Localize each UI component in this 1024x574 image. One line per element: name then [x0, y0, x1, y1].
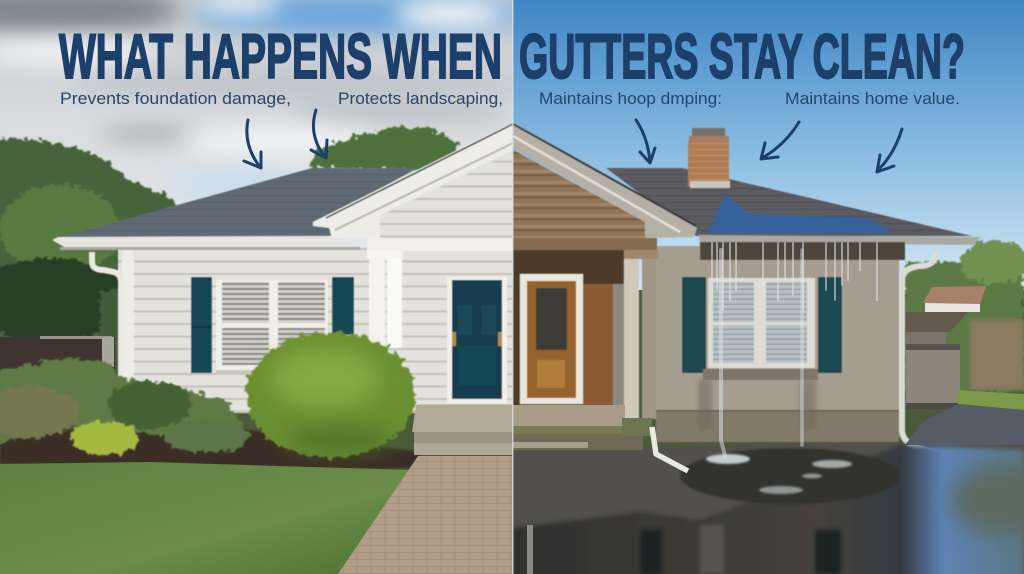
tree: left background — [0, 138, 178, 345]
water splashes — [706, 454, 852, 494]
arrows — [244, 110, 902, 172]
arrow 5 — [877, 129, 902, 172]
title: WHAT HAPPENS WHEN — [59, 22, 502, 92]
gable wall — [380, 152, 513, 240]
downspout: right — [902, 252, 938, 453]
chimney — [688, 128, 730, 188]
left shutters — [191, 277, 354, 373]
porch columns — [624, 259, 656, 419]
blue wet roof patch — [708, 195, 895, 233]
storage box and yard — [905, 344, 1024, 445]
gable fascia — [313, 122, 513, 238]
house: left clean side — [52, 122, 513, 413]
overflow water streams — [712, 243, 877, 456]
front door — [447, 277, 507, 403]
window sill — [703, 369, 818, 380]
trees and neighbouring buildings: right background — [905, 240, 1024, 392]
shrubs row — [0, 358, 245, 450]
left window — [216, 280, 328, 370]
house: right dirty side — [513, 122, 980, 453]
label: home value: Maintains home value. — [785, 89, 960, 108]
fence — [0, 336, 115, 369]
porch beam — [513, 238, 658, 259]
weathered wood gable — [513, 150, 645, 240]
gable fascia — [513, 122, 697, 238]
right shutters — [682, 277, 842, 373]
ground: right dark asphalt — [513, 440, 1024, 574]
left roof — [57, 168, 418, 238]
front steps: left — [412, 405, 513, 455]
stucco wall — [656, 246, 899, 426]
arrow 3 — [636, 120, 655, 163]
panel: right sky — [513, 0, 1024, 290]
flood water — [513, 445, 1024, 574]
large round boxwood bush — [246, 332, 416, 458]
porch columns — [367, 250, 403, 348]
shrub: yellow-green — [71, 421, 139, 455]
panel: left sky with clouds — [0, 0, 530, 300]
broken white downspout elbow — [652, 427, 688, 471]
centre split line — [512, 0, 514, 574]
arrow 2 — [311, 110, 327, 158]
clean gutter — [52, 236, 360, 375]
brick walkway — [338, 456, 513, 574]
front steps: right — [513, 405, 652, 450]
overflowing gutter — [698, 235, 980, 260]
water stains — [698, 380, 816, 430]
arrow 1 — [244, 120, 261, 168]
lawn — [0, 462, 410, 574]
label: foundation: Prevents foundation damage, — [60, 89, 291, 108]
porch wall — [402, 251, 513, 405]
arrow 4 — [761, 122, 799, 159]
right window — [708, 278, 815, 368]
porch beam — [367, 238, 513, 251]
benefit labels — [60, 89, 960, 108]
tree: behind roof — [308, 127, 460, 170]
label: landscaping: Protects landscaping, — [338, 89, 503, 108]
right roof — [606, 168, 972, 236]
left wall — [118, 248, 418, 413]
wood door — [520, 274, 583, 404]
label: hoop dmping: Maintains hoop dmping: — [539, 89, 722, 108]
porch recess — [513, 250, 628, 405]
mulch bed — [0, 430, 420, 470]
shrub: low green — [165, 419, 249, 453]
